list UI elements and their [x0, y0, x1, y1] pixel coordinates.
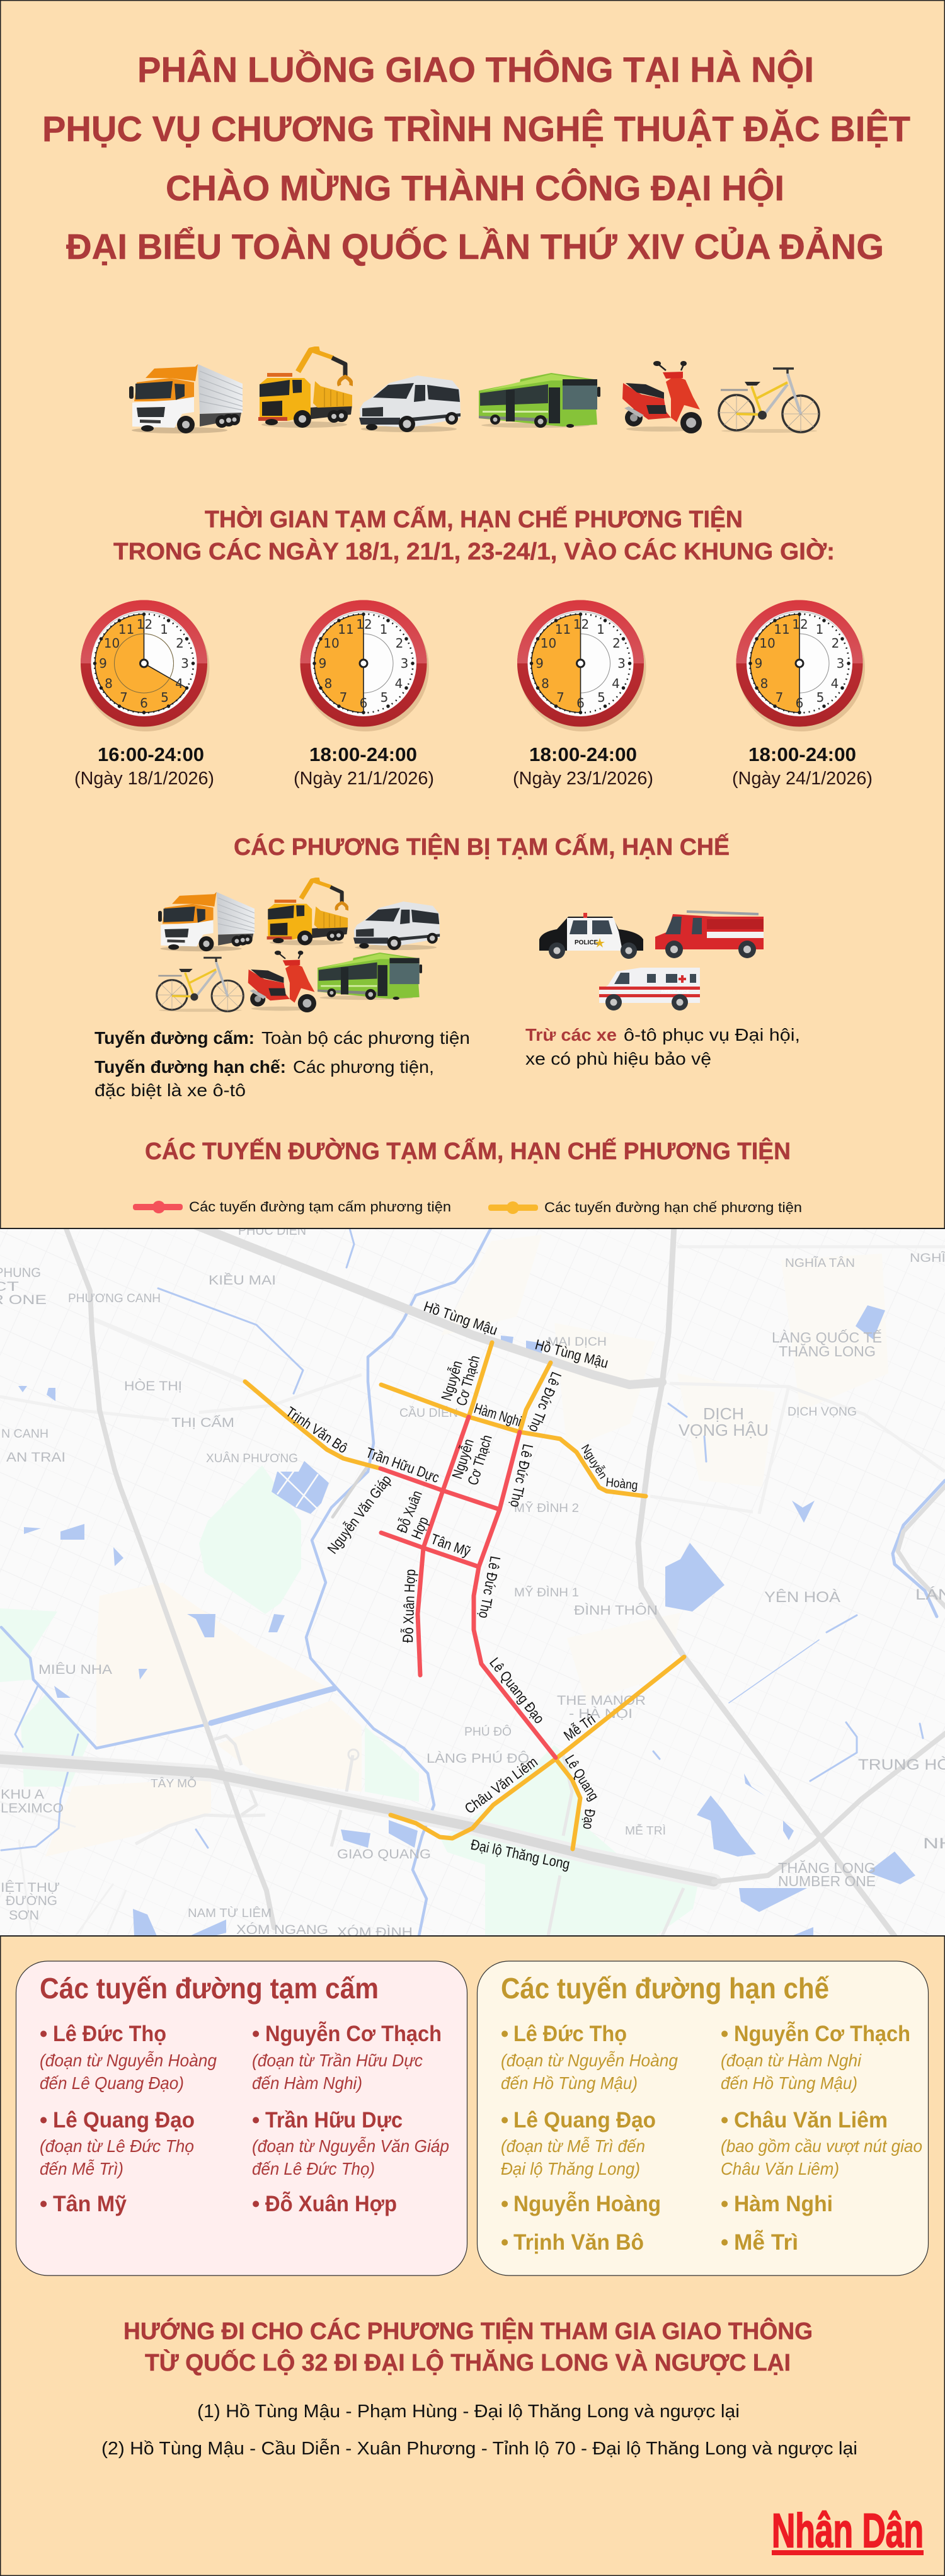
clock 3: 6: [576, 696, 585, 711]
map: place names: MAI DỊCH: [547, 1336, 607, 1349]
route list: Nguyễn Hoàng: [513, 2191, 661, 2216]
map: place names: YÊN HOÀ: [764, 1589, 840, 1606]
map: place names: CẦU DIỄN: [399, 1406, 458, 1420]
clock 4: [736, 600, 865, 731]
clock captions: [74, 743, 873, 789]
restricted vehicles group: [157, 879, 440, 1012]
vehicle row: [129, 348, 819, 433]
text: banned and restricted routes: Các phương tiện,: [293, 1057, 434, 1077]
route list: •: [501, 2022, 508, 2046]
heading: directions: [123, 2316, 813, 2376]
route list: •: [252, 2108, 260, 2132]
clock captions: 18:00-24:00: [309, 743, 417, 765]
heading: time: [113, 505, 835, 565]
route list: (bao gồm cầu vượt nút giao: [721, 2136, 922, 2156]
map: place names: MIÊU NHA: [38, 1663, 112, 1677]
route list: •: [501, 2108, 508, 2132]
clock 4: 6: [796, 696, 803, 711]
heading: directions: TỪ QUỐC LỘ 32 ĐI ĐẠI LỘ THĂNG LONG VÀ NGƯỢC LẠI: [145, 2348, 791, 2376]
map: place names: NAM TỪ LIÊM: [188, 1906, 272, 1920]
map: road labels: Tân Mỹ: [428, 1530, 473, 1560]
map: place names: MỸ ĐÌNH 2: [514, 1501, 579, 1515]
route list: Đại lộ Thăng Long): [501, 2159, 640, 2178]
map: road labels: Đỗ Xuân Hợp: [399, 1569, 418, 1643]
clock 1: [81, 600, 209, 731]
map: place names: ĐƯỜNG: [6, 1894, 57, 1908]
map: place names: MỸ ĐÌNH 1: [514, 1586, 579, 1600]
map legend: Các tuyến đường tạm cấm phương tiện: [189, 1199, 451, 1215]
map: road labels: Lê Đức Thọ: [476, 1555, 504, 1620]
clock 2: 7: [340, 690, 347, 705]
map: place names: THĂNG LONG: [778, 1860, 876, 1876]
heading: time: TRONG CÁC NGÀY 18/1, 21/1, 23-24/1, VÀO CÁC KHUNG GIỜ:: [113, 537, 835, 565]
map: restricted routes (yellow): [245, 1342, 684, 1849]
map frame: [0, 1228, 945, 1936]
map: road labels: Nguyễn: [438, 1359, 466, 1402]
route list: Nguyễn Cơ Thạch: [734, 2021, 910, 2046]
map: road labels: Cơ Thạch: [464, 1433, 495, 1487]
map: place names: XÓM NGANG: [236, 1923, 328, 1937]
heading: routes: CÁC TUYẾN ĐƯỜNG TẠM CẤM, HẠN CHẾ PHƯƠNG TIỆN: [145, 1137, 791, 1165]
clock 1: 3: [181, 656, 189, 671]
text: exemption: xe có phù hiệu bảo vệ: [525, 1049, 711, 1068]
route list: •: [252, 2022, 260, 2046]
clock 2: 1: [380, 622, 387, 637]
panel: banned routes: [16, 1961, 467, 2275]
clock 2: 2: [396, 636, 403, 651]
heading: vehicles: CÁC PHƯƠNG TIỆN BỊ TẠM CẤM, HẠN CHẾ: [234, 833, 730, 861]
route list: Hàm Nghi: [734, 2192, 833, 2216]
map: place names: PHƯƠNG CANH: [68, 1292, 161, 1305]
map: road labels: Lê Quang Đạo: [486, 1654, 548, 1727]
map: road labels: Lê Đức Thọ: [526, 1370, 564, 1435]
map: road labels: Hàm Nghi: [472, 1400, 524, 1429]
clock captions: (Ngày 23/1/2026): [513, 769, 653, 789]
title: PHÂN LUỒNG GIAO THÔNG TẠI HÀ NỘI: [137, 49, 814, 90]
map: road labels: Nguyễn Văn Giáp: [324, 1472, 394, 1557]
map: road labels: Đỗ Xuân: [394, 1488, 425, 1535]
route list: Lê Đức Thọ: [513, 2022, 627, 2046]
clock captions: (Ngày 24/1/2026): [732, 769, 873, 789]
clock 4: 10: [759, 636, 776, 651]
map: road labels: [283, 1298, 638, 1872]
heading: time: THỜI GIAN TẠM CẤM, HẠN CHẾ PHƯƠNG TIỆN: [205, 505, 743, 533]
heading: directions: HƯỚNG ĐI CHO CÁC PHƯƠNG TIỆN THAM GIA GIAO THÔNG: [123, 2316, 813, 2345]
route list: Lê Quang Đạo: [513, 2108, 656, 2132]
map: place names: KHU A: [1, 1787, 44, 1802]
panel title: Các tuyến đường tạm cấm: [40, 1972, 379, 2005]
directions list: (1) Hồ Tùng Mậu - Phạm Hùng - Đại lộ Thăng Long và ngược lại: [197, 2401, 740, 2422]
map: road labels: Hồ Tùng Mậu: [534, 1336, 610, 1371]
map: rivers: [1, 1228, 945, 1936]
clock 1: 6: [140, 696, 148, 711]
clock 3: 10: [541, 636, 556, 651]
route list: •: [252, 2192, 260, 2216]
clock 3: 12: [573, 617, 589, 632]
map: place names: THỊ CẤM: [171, 1416, 234, 1430]
clock 4: 2: [832, 636, 839, 651]
clock 2: 10: [323, 636, 340, 651]
clock 3: 5: [597, 690, 605, 705]
clock 1: 12: [137, 617, 152, 632]
clock 4: 5: [816, 690, 824, 705]
route list: Châu Văn Liêm: [734, 2108, 888, 2132]
map: place names: ĐÌNH THÔN: [574, 1603, 658, 1618]
route list: (đoạn từ Nguyễn Văn Giáp: [252, 2136, 449, 2156]
map: road labels: Cơ Thạch: [453, 1353, 483, 1407]
route list: •: [501, 2230, 508, 2255]
clock 2: 11: [338, 622, 354, 637]
map: place names: TÂY MỖ: [151, 1777, 197, 1790]
route list: đến Hồ Tùng Mậu): [501, 2073, 638, 2093]
map: [0, 1223, 945, 1940]
map: place names: N CANH: [1, 1428, 49, 1441]
route list: [501, 2021, 922, 2255]
clock 4: 3: [837, 656, 844, 671]
clock 4: 9: [755, 656, 762, 671]
map: road labels: Lê Đức Thọ: [507, 1443, 537, 1509]
title: PHỤC VỤ CHƯƠNG TRÌNH NGHỆ THUẬT ĐẶC BIỆT: [42, 108, 910, 149]
clock 3: 7: [556, 690, 564, 705]
clock 2: 3: [401, 656, 408, 671]
map: light streets: [0, 1247, 945, 1936]
text: banned and restricted routes: Toàn bộ các phương tiện: [261, 1028, 470, 1048]
exempt vehicles group: [539, 912, 764, 1010]
clock 2: 8: [324, 676, 332, 691]
route list: (đoạn từ Nguyễn Hoàng: [40, 2051, 217, 2070]
map: place names: NH: [923, 1835, 945, 1852]
map: road labels: Đại lộ Thăng Long: [469, 1836, 571, 1872]
route list: đến Lê Đức Thọ): [252, 2159, 375, 2178]
clock 1: 1: [160, 622, 168, 637]
route list: Nguyễn Cơ Thạch: [265, 2021, 442, 2046]
map: road labels: Hồ Tùng Mậu: [421, 1298, 500, 1338]
clock captions: (Ngày 18/1/2026): [74, 769, 214, 789]
clock captions: (Ngày 21/1/2026): [294, 769, 434, 789]
route list: Lê Quang Đạo: [53, 2108, 195, 2132]
route list: •: [721, 2192, 728, 2216]
clock 3: 1: [597, 622, 605, 637]
route list: [40, 2021, 449, 2216]
clock 3: 4: [612, 676, 620, 691]
route list: (đoạn từ Nguyễn Hoàng: [501, 2051, 678, 2070]
clock 4: 4: [831, 676, 839, 691]
route list: •: [721, 2022, 728, 2046]
route list: đến Hàm Nghi): [252, 2073, 362, 2093]
route list: Lê Đức Thọ: [53, 2022, 166, 2046]
clock 1: 11: [118, 622, 134, 637]
clock 4: 7: [776, 690, 783, 705]
clock 2: 6: [360, 696, 367, 711]
clock captions: 16:00-24:00: [98, 743, 204, 765]
text: exemption: ô-tô phục vụ Đại hội,: [624, 1025, 800, 1045]
map: road labels: Nguyễn: [449, 1437, 477, 1481]
text: exemption: Trừ các xe: [525, 1025, 617, 1045]
map: lakes: [18, 1305, 915, 1936]
clock 1: 2: [176, 636, 184, 651]
route list: •: [40, 2108, 47, 2132]
map: place names: - HÀ NỘI: [569, 1707, 633, 1721]
route list: đến Lê Quang Đạo): [40, 2073, 184, 2093]
map: place names: MỄ TRÌ: [625, 1824, 666, 1837]
map: road labels: Hợp: [408, 1514, 432, 1542]
map: place names: NGHĨA TÂN: [785, 1256, 855, 1270]
route list: đến Mễ Trì): [40, 2159, 123, 2178]
route list: (đoạn từ Lê Đức Thọ: [40, 2136, 194, 2156]
clock 3: 3: [617, 656, 626, 671]
text: banned and restricted routes: Tuyến đường hạn chế:: [94, 1057, 286, 1077]
map: place names: KIỀU MAI: [209, 1273, 276, 1288]
clock captions: 18:00-24:00: [748, 743, 856, 765]
clock 3: 2: [612, 636, 621, 651]
map: place names: NUMBER ONE: [778, 1873, 876, 1889]
clock 2: 4: [395, 676, 403, 691]
clock 2: 5: [381, 690, 388, 705]
clock 4: 1: [816, 622, 823, 637]
map: place names: DỊCH VỌNG: [788, 1405, 857, 1419]
route list: •: [40, 2022, 47, 2046]
map: place names: XÓM ĐÌNH: [337, 1925, 413, 1940]
directions list: [101, 2401, 857, 2459]
clock captions: 18:00-24:00: [529, 743, 637, 765]
title: ĐẠI BIỂU TOÀN QUỐC LẦN THỨ XIV CỦA ĐẢNG: [66, 226, 884, 267]
route list: •: [501, 2192, 508, 2216]
map legend: [133, 1199, 802, 1215]
map: place names: THĂNG LONG: [779, 1343, 876, 1360]
clock 3: 11: [555, 622, 571, 637]
title: [42, 49, 910, 267]
route list: Đỗ Xuân Hợp: [265, 2191, 397, 2216]
clock 2: [300, 600, 429, 731]
route list: •: [40, 2192, 47, 2216]
clock 3: 8: [541, 676, 549, 691]
map: road labels: Châu Văn Liêm: [462, 1753, 541, 1817]
map: place names: PHÚC DIỄN: [238, 1223, 306, 1238]
map: road labels: Nguyễn: [578, 1442, 610, 1482]
clock 1: 9: [99, 656, 107, 671]
route list: (đoạn từ Hàm Nghi: [721, 2051, 862, 2070]
map: place names: GIAO QUANG: [337, 1847, 431, 1862]
clock 1: 5: [161, 690, 169, 705]
route list: Châu Văn Liêm): [721, 2159, 839, 2178]
map: place names: AN TRAI: [6, 1450, 66, 1465]
clock 2: 9: [319, 656, 326, 671]
route list: đến Hồ Tùng Mậu): [721, 2073, 857, 2093]
map: road labels: Lê Quang: [562, 1752, 602, 1803]
route list: Trịnh Văn Bô: [513, 2230, 644, 2255]
map: place names: LÀNG QUỐC TẾ: [772, 1329, 882, 1346]
map: place names: LÀNG PHÚ ĐÔ: [427, 1751, 529, 1766]
text: banned and restricted routes: đặc biệt là xe ô-tô: [94, 1080, 246, 1100]
clock 1: 7: [120, 690, 128, 705]
route list: •: [721, 2230, 728, 2255]
text: exemption: [525, 1025, 800, 1068]
text: banned and restricted routes: [94, 1028, 470, 1100]
clock 1: 4: [175, 676, 183, 691]
map: road labels: Trịnh Văn Bô: [283, 1404, 351, 1457]
route list: Tân Mỹ: [53, 2192, 127, 2216]
map legend: Các tuyến đường hạn chế phương tiện: [544, 1199, 802, 1215]
map: place names: DỊCH: [703, 1404, 744, 1423]
map: road labels: Trần Hữu Dực: [364, 1444, 442, 1485]
clock 3: 9: [536, 656, 544, 671]
title: CHÀO MỪNG THÀNH CÔNG ĐẠI HỘI: [166, 168, 784, 209]
map: road labels: Đạo: [580, 1808, 598, 1830]
map: place names: PHÚ ĐÔ: [464, 1725, 512, 1739]
map: place names: IỆT THỰ: [1, 1880, 60, 1895]
directions list: (2) Hồ Tùng Mậu - Cầu Diễn - Xuân Phương - Tỉnh lộ 70 - Đại lộ Thăng Long và ngược lại: [101, 2438, 857, 2459]
map: road labels: Hoàng: [605, 1475, 638, 1492]
map: road labels: Mễ Trì: [561, 1710, 598, 1744]
clock 4: 12: [792, 617, 808, 632]
map: place names: SƠN: [9, 1908, 39, 1923]
map: place names: XUÂN PHƯƠNG: [206, 1451, 298, 1465]
text: banned and restricted routes: Tuyến đường cấm:: [94, 1028, 255, 1048]
clock 2: 12: [356, 617, 372, 632]
clock 1: 10: [104, 636, 120, 651]
map: place names: HÒE THỊ: [124, 1379, 182, 1394]
route list: Trần Hữu Dực: [265, 2108, 403, 2132]
clock 4: 8: [760, 676, 768, 691]
route list: (đoạn từ Trần Hữu Dực: [252, 2051, 423, 2070]
route list: Mễ Trì: [734, 2230, 798, 2255]
map: gray roads: [0, 1225, 945, 1940]
map: place names: THE MANOR: [557, 1693, 646, 1708]
clock 3: [517, 600, 646, 731]
panel: restricted routes: [478, 1961, 929, 2275]
map: place names: VỌNG HẬU: [679, 1421, 769, 1440]
map: place names: [0, 1223, 945, 1940]
route list: •: [721, 2108, 728, 2132]
route list: (đoạn từ Mễ Trì đến: [501, 2136, 645, 2156]
clock 4: 11: [774, 622, 790, 637]
map: banned routes (red): [381, 1417, 556, 1758]
map: place names: LEXIMCO: [1, 1801, 64, 1816]
panel title: Các tuyến đường hạn chế: [501, 1972, 829, 2005]
clock 1: 8: [105, 676, 113, 691]
